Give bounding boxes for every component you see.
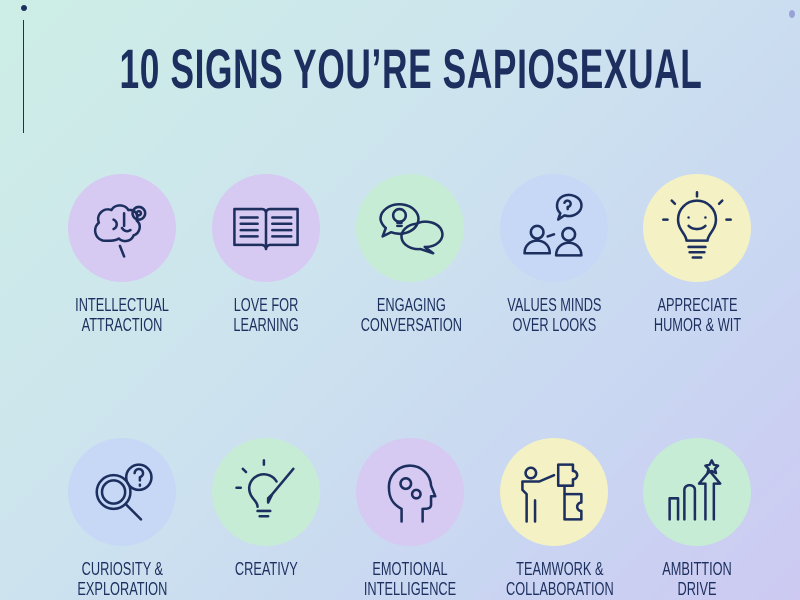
title: 10 SIGNS YOU’RE SAPIOSEXUAL — [120, 37, 702, 100]
item: curiosity & exploration: CURIOSITY & — [81, 559, 163, 579]
item: love for learning — [212, 174, 320, 335]
item: values minds over looks — [507, 194, 601, 335]
item: intellectual attraction — [68, 174, 176, 335]
item: emotional intelligence: INTELLIGENCE — [364, 579, 456, 599]
item: teamwork & collaboration: COLLABORATION — [506, 579, 614, 599]
item: teamwork & collaboration: TEAMWORK & — [516, 559, 604, 579]
item: ambition drive: DRIVE — [677, 579, 717, 599]
item: values minds over looks: VALUES MINDS — [507, 295, 601, 315]
item: intellectual attraction: ATTRACTION — [82, 315, 162, 335]
item: engaging conversation — [356, 174, 464, 335]
item: love for learning: LOVE FOR — [234, 295, 298, 315]
item: engaging conversation: CONVERSATION — [361, 315, 462, 335]
item: engaging conversation: ENGAGING — [377, 295, 446, 315]
item: values minds over looks: OVER LOOKS — [512, 315, 596, 335]
item: creativity: CREATIVY — [235, 559, 297, 579]
item: love for learning: LEARNING — [233, 315, 299, 335]
item: intellectual attraction: INTELLECTUAL — [75, 295, 169, 315]
item: curiosity & exploration — [68, 438, 176, 599]
item: ambition drive — [643, 438, 751, 599]
item: emotional intelligence — [356, 438, 464, 599]
item: creativity — [212, 438, 320, 579]
item: ambition drive: AMBITTION — [662, 559, 732, 579]
item: teamwork & collaboration — [500, 438, 614, 599]
decorative dots top right — [789, 10, 795, 18]
item: emotional intelligence: EMOTIONAL — [372, 559, 448, 579]
item: appreciate humor & wit: HUMOR & WIT — [653, 315, 741, 335]
decorative left line — [21, 5, 27, 11]
item: appreciate humor & wit — [643, 174, 751, 335]
item: appreciate humor & wit: APPRECIATE — [657, 295, 737, 315]
item: curiosity & exploration: EXPLORATION — [77, 579, 167, 599]
